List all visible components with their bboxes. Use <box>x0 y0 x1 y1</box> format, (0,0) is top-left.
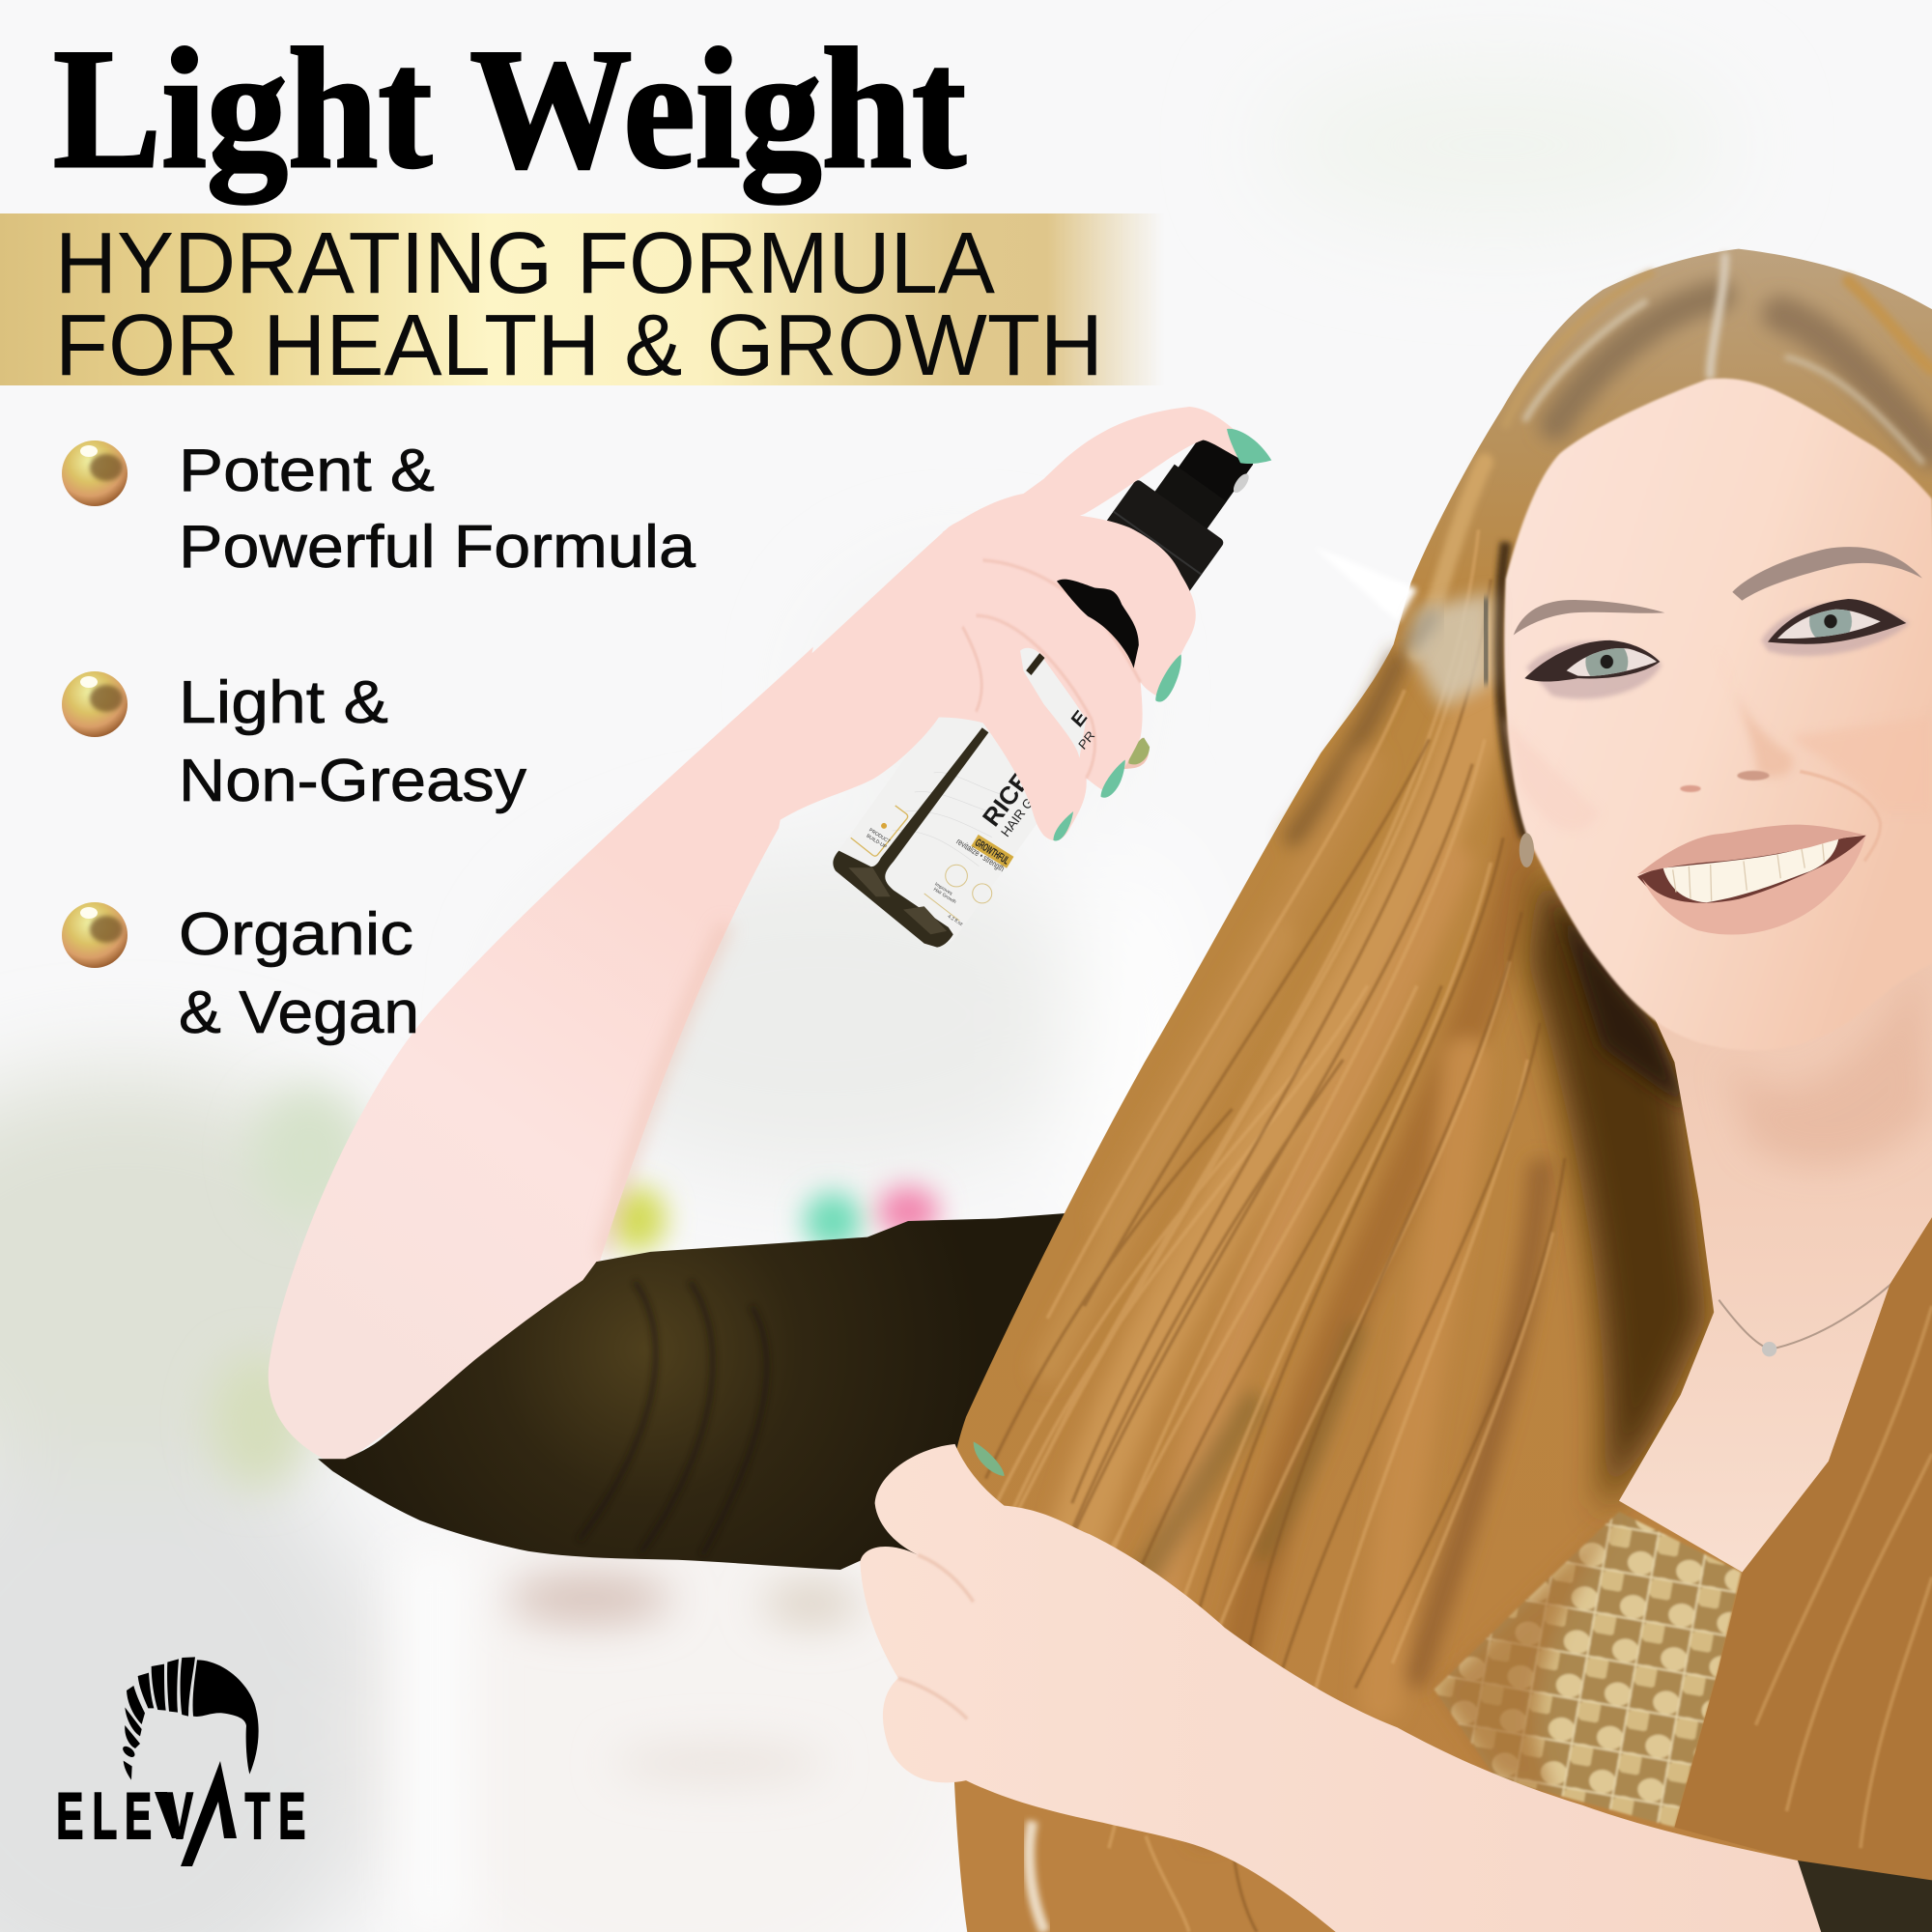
wavy label texture <box>892 773 1005 867</box>
banner line 2: FOR HEALTH & GROWTH <box>55 298 1103 394</box>
benefit text: Potent & <box>179 438 435 504</box>
crown highlights <box>1555 296 1932 450</box>
ribbed collar <box>1090 478 1225 608</box>
small label copy: Hair Growth <box>932 887 957 905</box>
nose nostrils <box>1680 771 1770 792</box>
bottle label: PRODUCT <box>867 828 891 845</box>
ring nail <box>1053 811 1073 841</box>
lower hand and forearm <box>860 1441 1826 1932</box>
logo: Elevate <box>56 1657 305 1866</box>
face <box>1504 379 1932 1050</box>
middle nail <box>1101 759 1125 798</box>
benefit text: Non-Greasy <box>179 748 526 814</box>
bottle label <box>833 727 1065 948</box>
finger shading <box>962 560 1141 779</box>
small label copy: Improves <box>933 882 953 897</box>
index nail <box>1155 654 1181 702</box>
earring <box>1520 833 1534 867</box>
light hair strands <box>974 529 1552 1932</box>
cheek and nose shading <box>1504 647 1932 831</box>
bottle body <box>831 589 1144 947</box>
upper arm <box>269 647 813 1466</box>
dark base and stripe <box>833 727 988 948</box>
spray mist <box>1312 546 1493 708</box>
neck and chest <box>1619 788 1932 1573</box>
benefit text: Light & <box>179 669 388 736</box>
eye shadow <box>1526 604 1910 699</box>
spray bottle <box>739 393 1285 948</box>
growth badge: GROWTHFUL <box>973 838 1011 867</box>
thumb <box>942 407 1247 542</box>
benefit text: & Vegan <box>179 980 419 1046</box>
left eye <box>1524 639 1660 685</box>
bottle label: HAIR GROWTH <box>998 756 1065 839</box>
label gap between fingers <box>1020 648 1097 758</box>
bottle shoulder <box>1024 527 1188 676</box>
right side hair <box>1674 1217 1932 1880</box>
right eye <box>1768 599 1906 644</box>
eyebrows <box>1514 547 1922 635</box>
dark gap next to face <box>1499 542 1525 838</box>
spray hand over bottle <box>739 407 1271 848</box>
wordmark: ELEVATE <box>56 1779 305 1852</box>
fingertip nail on hair <box>974 1441 1005 1476</box>
brand text: RICE <box>977 766 1036 832</box>
actuator nozzle <box>1151 421 1263 537</box>
icon: V and A chevron <box>155 1761 237 1866</box>
benefit 3 <box>62 901 419 1046</box>
label gap between fingers: E <box>1067 706 1092 731</box>
label gap between fingers: PR <box>1076 727 1097 753</box>
small label copy <box>932 882 964 927</box>
gold banner <box>0 213 1164 394</box>
benefit icons <box>924 865 992 921</box>
pinky nail <box>1128 738 1150 764</box>
icon: gold pearl <box>62 671 128 737</box>
shoulder between fingers <box>1057 580 1139 668</box>
thumb nail <box>1227 429 1271 464</box>
icon: gold pearl <box>62 902 128 968</box>
benefit 2 <box>62 669 526 814</box>
gold info box <box>851 806 908 856</box>
benefit text: Organic <box>179 901 413 968</box>
benefit text: Powerful Formula <box>179 514 696 581</box>
icon: gold pearl <box>62 440 128 506</box>
dark hair strands <box>985 579 1565 1932</box>
facial features <box>1504 547 1932 935</box>
hair tonal streaks <box>1047 640 1540 1824</box>
icon: hair silhouette <box>121 1657 259 1780</box>
bottle label: BUILD-UP <box>866 834 888 850</box>
smile <box>1637 825 1866 935</box>
pinky finger <box>1112 738 1149 771</box>
lower right sleeve <box>1798 1861 1932 1932</box>
long hair <box>947 249 1932 1932</box>
woman and product illustration <box>269 249 1932 1932</box>
necklace <box>1719 1284 1891 1356</box>
smile line <box>1800 772 1881 861</box>
dark hair beside neck <box>1528 863 1707 1516</box>
small label copy: 4.2 fl.oz <box>947 914 964 927</box>
sequin top <box>1435 1512 1741 1828</box>
benefit 1 <box>62 438 696 581</box>
banner line 1: HYDRATING FORMULA <box>55 215 995 312</box>
palm and fingers <box>739 511 1196 848</box>
black sleeve <box>318 1210 1109 1577</box>
tagline: revitalize • strength <box>954 837 1007 873</box>
title: Light Weight <box>53 13 966 204</box>
growth badge <box>971 835 1013 868</box>
